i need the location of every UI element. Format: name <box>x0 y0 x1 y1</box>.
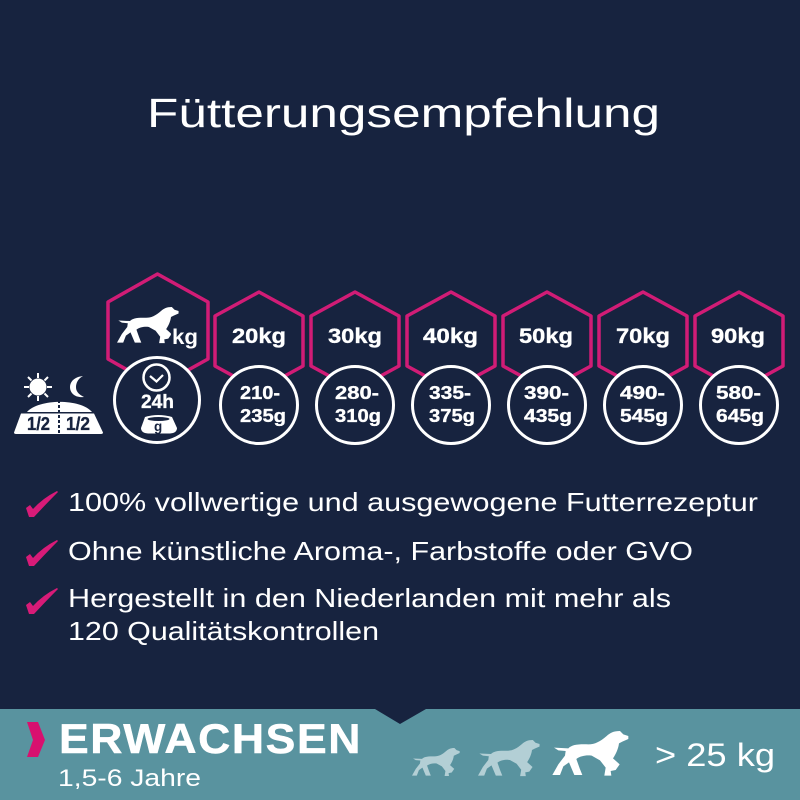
circle: 335-375g <box>412 366 490 444</box>
icon: day and night split bowl <box>14 373 103 436</box>
circle: daily amount icon: 24h <box>141 392 174 413</box>
circle: 280-310g <box>316 366 394 444</box>
hexagon: dog weight header: kg <box>172 326 198 349</box>
hexagon: 40kg: 40kg <box>423 325 478 348</box>
hexagon: 90kg: 90kg <box>711 325 765 348</box>
title: Fütterungsempfehlung <box>147 90 660 136</box>
panel: benefits list <box>26 487 758 646</box>
hexagon: 50kg <box>503 292 591 390</box>
hexagon: 50kg: 50kg <box>519 325 573 348</box>
icon: large dog <box>552 731 628 776</box>
icon: small dog <box>412 748 460 776</box>
heading: life stage: ERWACHSEN <box>59 715 362 762</box>
text: benefit 1: 100% vollwertige und ausgewogene Futterrezeptur <box>68 487 758 517</box>
icon: pink chevron <box>27 722 45 757</box>
circle: daily amount icon <box>114 358 200 442</box>
panel: footer band <box>0 709 800 800</box>
circle: 580-645g: 580- <box>716 382 761 403</box>
circle: 335-375g: 335- <box>429 382 471 403</box>
hexagon: 20kg <box>215 292 303 390</box>
hexagon: dog weight header <box>108 274 208 387</box>
circle: 490-545g: 490- <box>620 382 665 403</box>
hexagon: 20kg: 20kg <box>232 325 286 348</box>
hexagon: 70kg <box>599 292 687 390</box>
hexagon: 30kg: 30kg <box>328 325 382 348</box>
text: benefit 3: Hergestellt in den Niederlanden mit mehr als <box>68 583 671 613</box>
icon: day and night split bowl: 1/2 <box>27 414 50 434</box>
icon: day and night split bowl: 1/2 <box>66 414 90 434</box>
icon: medium dog <box>478 740 540 776</box>
panel: feeding table <box>108 274 783 444</box>
text: weight class: > 25 kg <box>655 737 775 773</box>
text: benefit 3: 120 Qualitätskontrollen <box>68 616 379 646</box>
circle: 490-545g <box>604 366 682 444</box>
circle: 580-645g: 645g <box>716 405 764 426</box>
circle: 390-435g: 390- <box>524 382 569 403</box>
hexagon: 90kg <box>695 292 783 390</box>
circle: 390-435g <box>508 366 586 444</box>
circle: daily amount icon: g <box>154 419 162 434</box>
circle: 210-235g: 235g <box>240 405 286 426</box>
hexagon: 40kg <box>407 292 495 390</box>
text: age range: 1,5-6 Jahre <box>58 765 201 792</box>
text: benefit 2: Ohne künstliche Aroma-, Farbstoffe oder GVO <box>68 536 693 566</box>
icon: check 2 <box>26 540 58 566</box>
text: benefit 3 <box>68 583 671 646</box>
circle: 210-235g <box>220 366 298 444</box>
hexagon: 70kg: 70kg <box>616 325 670 348</box>
circle: 390-435g: 435g <box>524 405 572 426</box>
icon: check 1 <box>26 491 58 517</box>
circle: 490-545g: 545g <box>620 405 668 426</box>
icon: check 3 <box>26 588 58 614</box>
circle: 280-310g: 280- <box>335 382 379 403</box>
hexagon: 30kg <box>311 292 399 390</box>
circle: 335-375g: 375g <box>429 405 475 426</box>
circle: 280-310g: 310g <box>335 405 381 426</box>
circle: 210-235g: 210- <box>240 382 280 403</box>
circle: 580-645g <box>700 366 778 444</box>
